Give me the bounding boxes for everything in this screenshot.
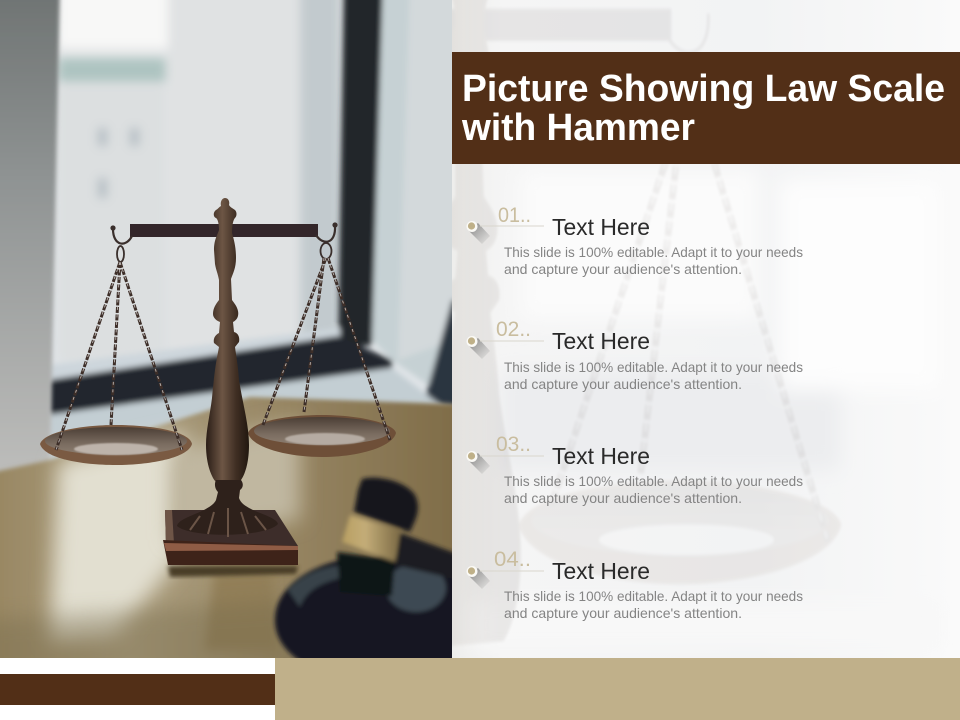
list item 02 bbox=[466, 318, 807, 392]
bottom left brown bar bbox=[0, 674, 275, 705]
window frame and sill bbox=[48, 0, 480, 475]
base shadow bbox=[168, 566, 298, 577]
foot bbox=[177, 480, 278, 537]
list item 02: Text Here bbox=[552, 328, 650, 354]
wooden table bbox=[0, 394, 452, 658]
list item 04: Text Here bbox=[552, 558, 650, 584]
title: with Hammer bbox=[461, 107, 695, 149]
list item 03 bbox=[466, 433, 807, 506]
chains bbox=[56, 262, 182, 450]
list item 03: Text Here bbox=[552, 443, 650, 469]
balance scale bbox=[40, 198, 396, 577]
photo: law scale and gavel bbox=[0, 0, 480, 680]
base bbox=[163, 510, 298, 565]
right pan bbox=[248, 415, 396, 457]
left wall bbox=[0, 0, 60, 475]
list item 04: This slide is 100% editable. Adapt it to your needs bbox=[504, 588, 803, 604]
window background bbox=[51, 0, 430, 394]
list item 03: 03.. bbox=[496, 433, 531, 456]
beam and hooks bbox=[110, 222, 338, 262]
list item 03: This slide is 100% editable. Adapt it to your needs bbox=[504, 473, 803, 489]
title: Picture Showing Law Scale bbox=[462, 68, 945, 110]
faded right panel bbox=[452, 0, 882, 658]
title banner bbox=[452, 52, 960, 164]
list item 04: and capture your audience's attention. bbox=[504, 605, 742, 621]
list item 04 bbox=[466, 548, 807, 621]
left pan bbox=[40, 425, 192, 465]
list item 04: 04.. bbox=[494, 548, 531, 571]
post bbox=[206, 198, 249, 482]
list item 01: and capture your audience's attention. bbox=[504, 261, 742, 277]
list item 01 bbox=[466, 204, 807, 277]
light washes bbox=[513, 184, 832, 457]
gavel bbox=[272, 474, 452, 658]
list item 02: and capture your audience's attention. bbox=[504, 376, 742, 392]
ghost of the scale bbox=[427, 0, 841, 646]
list item 03: and capture your audience's attention. bbox=[504, 490, 742, 506]
list item 01: Text Here bbox=[552, 214, 650, 240]
bottom tan bar bbox=[275, 658, 960, 720]
list item 02: 02.. bbox=[496, 318, 531, 341]
list item 01: This slide is 100% editable. Adapt it to your needs bbox=[504, 244, 803, 260]
list item 02: This slide is 100% editable. Adapt it to your needs bbox=[504, 359, 803, 375]
list item 01: 01.. bbox=[498, 204, 531, 227]
